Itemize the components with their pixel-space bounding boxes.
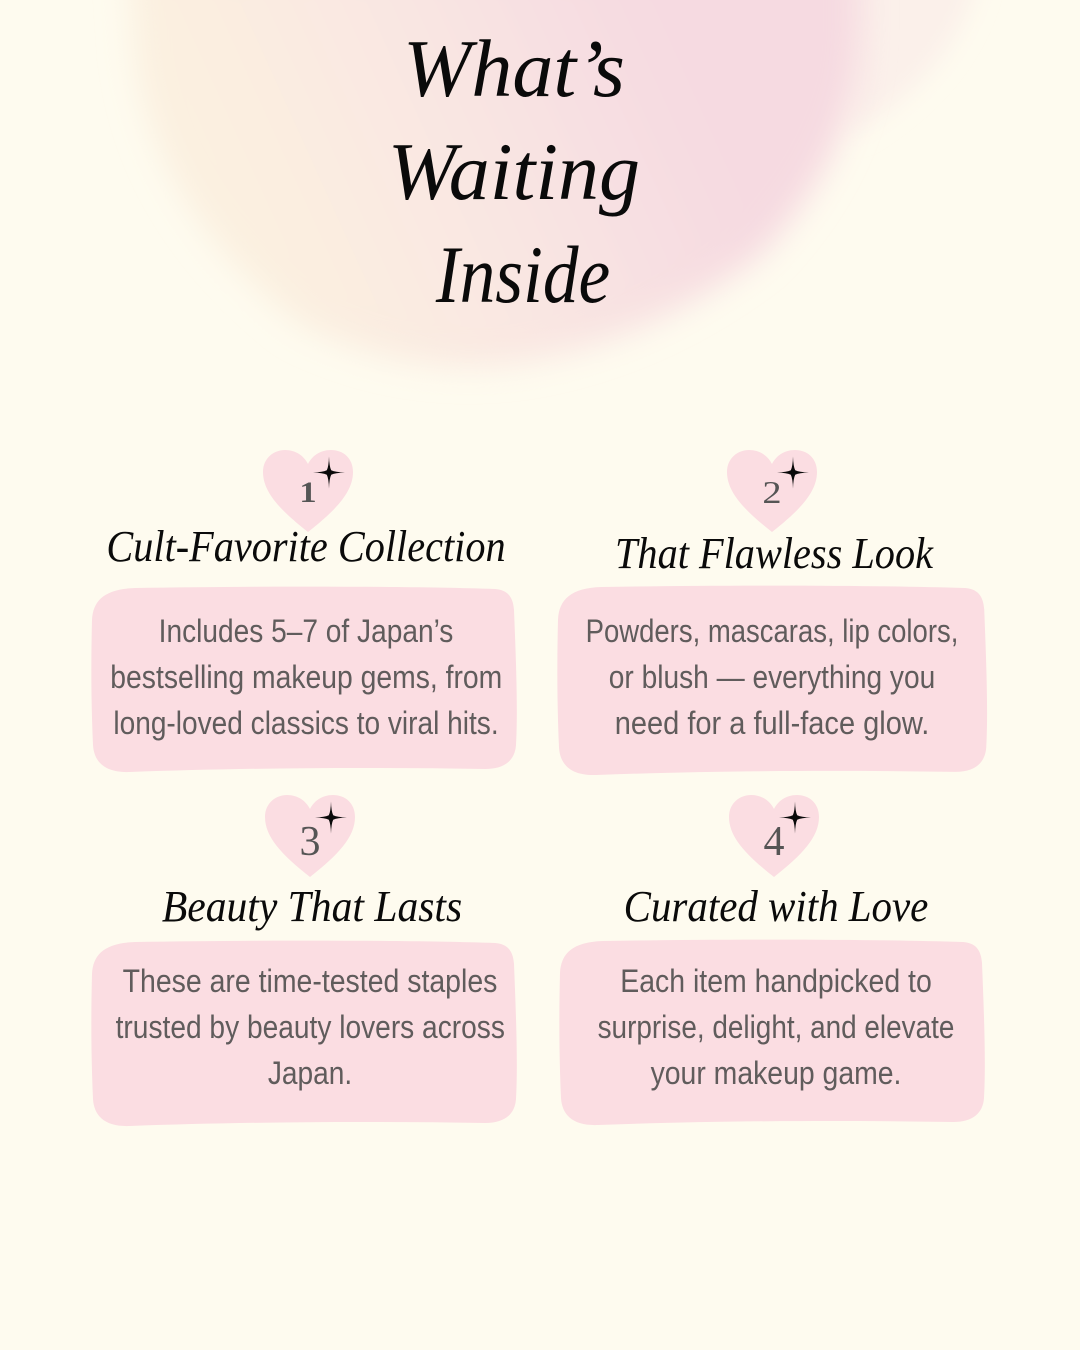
- body text 3: [116, 963, 505, 1091]
- body text 1: [110, 613, 502, 741]
- panel: card 1: [91, 450, 517, 772]
- number 1: 1: [299, 476, 317, 509]
- heading 4: Curated with Love: [623, 882, 928, 931]
- number 2: 2: [762, 474, 782, 510]
- number 4: 4: [764, 819, 784, 865]
- body text 3: trusted by beauty lovers across: [116, 1009, 505, 1045]
- body text 2: Powders, mascaras, lip colors,: [586, 613, 958, 649]
- body text 4: surprise, delight, and elevate: [598, 1009, 954, 1045]
- body text 2: need for a full-face glow.: [615, 705, 929, 741]
- heading 3: Beauty That Lasts: [161, 882, 462, 931]
- heading 2: That Flawless Look: [615, 529, 933, 578]
- panel: card 2: [557, 450, 987, 775]
- panel: card 3: [91, 795, 517, 1126]
- body text 4: [598, 963, 954, 1091]
- card 4 shapes: heart, sparkle and text box: [559, 795, 985, 1125]
- title: [388, 23, 640, 320]
- body text 4: your makeup game.: [651, 1055, 901, 1091]
- card 1 shapes: heart, sparkle and text box: [91, 450, 517, 772]
- body text 2: [586, 613, 958, 741]
- panel: card 4: [559, 795, 985, 1125]
- title: Inside: [435, 229, 610, 320]
- heading 1: Cult-Favorite Collection: [106, 522, 505, 571]
- title: Waiting: [388, 126, 640, 217]
- body text 3: These are time-tested staples: [123, 963, 497, 999]
- card 2 shapes: heart, sparkle and text box: [557, 450, 987, 775]
- title: What’s: [403, 23, 625, 114]
- background blush gradient: [133, 0, 962, 368]
- number 3: 3: [300, 819, 320, 865]
- body text 1: long-loved classics to viral hits.: [113, 705, 499, 741]
- body text 3: Japan.: [268, 1055, 352, 1091]
- body text 2: or blush — everything you: [609, 659, 935, 695]
- body text 1: Includes 5–7 of Japan’s: [159, 613, 453, 649]
- body text 4: Each item handpicked to: [620, 963, 932, 999]
- body text 1: bestselling makeup gems, from: [110, 659, 502, 695]
- card 3 shapes: heart, sparkle and text box: [91, 795, 517, 1126]
